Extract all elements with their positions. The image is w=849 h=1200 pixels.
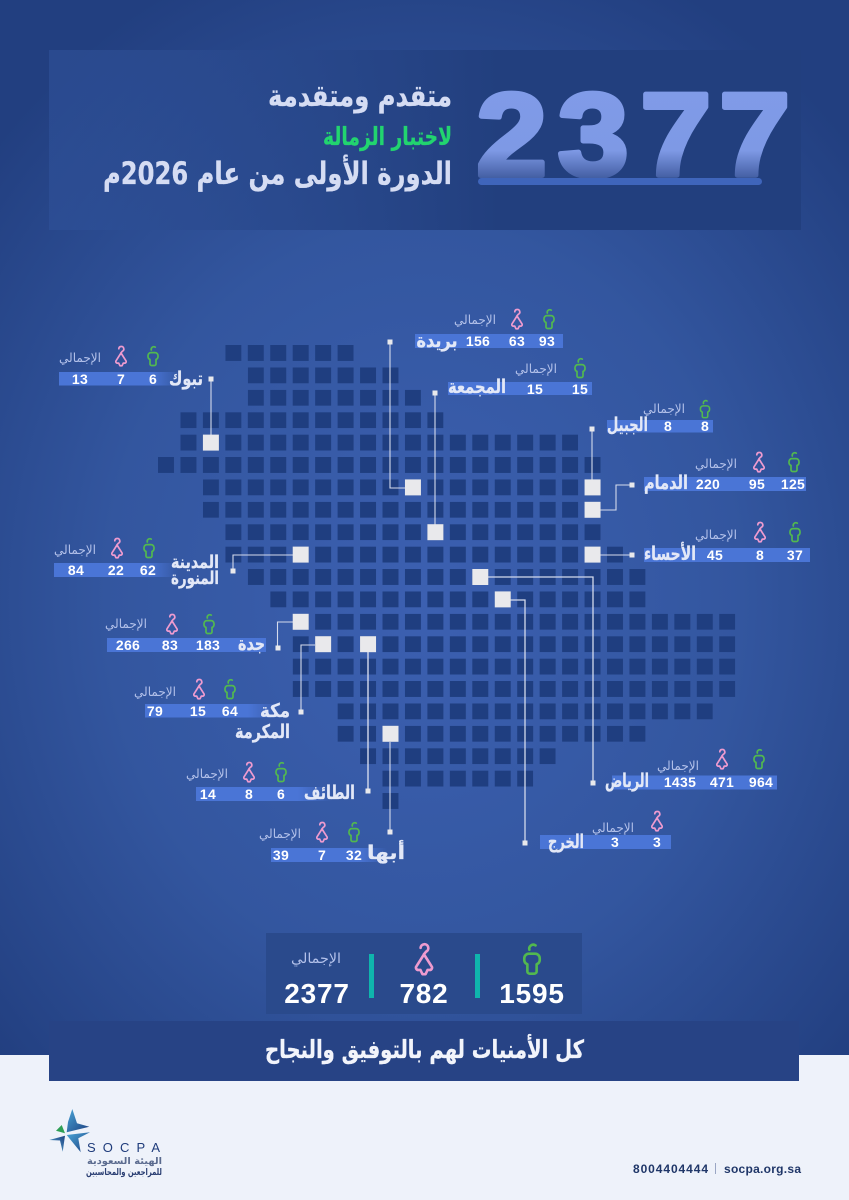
divider (369, 954, 374, 998)
city: Tabuk: تبوك (169, 368, 203, 390)
city: Madinah: 62 (140, 562, 156, 578)
city: Dammam: الإجمالي (695, 456, 737, 471)
city: Ahsa: 37 (787, 547, 803, 563)
city: Ahsa: 8 (756, 547, 764, 563)
city: Buraidah: بريدة (416, 330, 458, 352)
city: Madinah: المنورة (171, 568, 219, 589)
city: Dammam: الدمام (644, 472, 688, 494)
city: Madinah: الإجمالي (54, 542, 96, 557)
city: Jeddah (105, 614, 309, 655)
city: Tabuk: الإجمالي (59, 350, 101, 365)
city: Makkah: المكرمة (235, 721, 290, 743)
city: Tabuk: 7 (117, 371, 125, 387)
city: Jeddah: 183 (196, 637, 220, 653)
city: Makkah: 64 (222, 703, 238, 719)
city: Taif: 14 (200, 786, 216, 802)
city: Kharj (495, 591, 671, 853)
city: Jubail: الإجمالي (643, 401, 685, 416)
city: Majmaah: 15 (527, 381, 543, 397)
city: Jeddah: جدة (238, 633, 265, 655)
city: Taif (186, 636, 376, 804)
city: Buraidah: 63 (509, 333, 525, 349)
city: Madinah (54, 538, 309, 589)
city: Makkah: الإجمالي (134, 684, 176, 699)
heading line 2: لاختبار الزمالة (323, 122, 452, 152)
total column: الإجمالي (291, 951, 341, 967)
contact details (633, 1162, 801, 1176)
city: Ahsa: الأحساء (644, 542, 696, 565)
city: Riyadh (472, 569, 777, 792)
logo: SOCPA: الهيئة السعودية (87, 1156, 162, 1167)
city: Makkah: 15 (190, 703, 206, 719)
female column (399, 944, 449, 1009)
city: Makkah: مكة (260, 700, 290, 722)
city: Majmaah: الإجمالي (515, 361, 557, 376)
city: Ahsa: الإجمالي (695, 527, 737, 542)
city: Dammam (585, 452, 806, 518)
city: Abha: 32 (346, 847, 362, 863)
closing banner (49, 1021, 799, 1081)
city: Ahsa (585, 522, 810, 565)
city: Taif: 8 (245, 786, 253, 802)
heading line 1: متقدم ومتقدمة (268, 79, 452, 114)
city: Dammam: 95 (749, 476, 765, 492)
city: Dammam: 220 (696, 476, 720, 492)
logo: SOCPA: للمراجعين والمحاسبين (86, 1167, 162, 1178)
city: Kharj: 3 (611, 834, 619, 850)
logo: SOCPA: SOCPA (87, 1140, 160, 1155)
city: Jeddah: 83 (162, 637, 178, 653)
city: Jubail: 8 (701, 418, 709, 434)
male column (499, 945, 565, 1009)
city: Riyadh: 1435 (664, 774, 696, 790)
city: Madinah: 84 (68, 562, 84, 578)
city: Jubail (585, 401, 713, 495)
city: Kharj: 3 (653, 834, 661, 850)
city: Ahsa: 45 (707, 547, 723, 563)
header panel (49, 50, 801, 230)
city: Madinah: المدينة (171, 552, 219, 573)
city: Makkah (134, 636, 331, 743)
city: Taif: 6 (277, 786, 285, 802)
city: Kharj: الإجمالي (592, 820, 634, 835)
city: Abha: 39 (273, 847, 289, 863)
heading line 3: الدورة الأولى من عام 2026م (103, 154, 452, 192)
city: Tabuk: 13 (72, 371, 88, 387)
total column: 2377 (284, 978, 350, 1009)
contact details: 8004404444 (633, 1162, 708, 1176)
city: Jeddah: 266 (116, 637, 140, 653)
city: Buraidah (388, 309, 563, 495)
big number 2377: 2377 (476, 70, 790, 201)
city: Jubail: 8 (664, 418, 672, 434)
city: Majmaah: 15 (572, 381, 588, 397)
female column: 782 (399, 978, 449, 1009)
city: Taif: الطائف (304, 782, 355, 804)
city: Majmaah (427, 359, 592, 540)
city: Jubail: الجبيل (607, 414, 648, 436)
city: Abha: 7 (318, 847, 326, 863)
city: Riyadh: الرياض (605, 770, 649, 792)
icon: star (49, 1109, 90, 1152)
city: Majmaah: المجمعة (448, 376, 506, 398)
city: Riyadh: 964 (749, 774, 773, 790)
city: Abha: الإجمالي (259, 826, 301, 841)
city: Taif: الإجمالي (186, 766, 228, 781)
divider (475, 954, 480, 998)
city: Buraidah: الإجمالي (454, 312, 496, 327)
city: Dammam: 125 (781, 476, 805, 492)
closing banner: كل الأمنيات لهم بالتوفيق والنجاح (265, 1034, 584, 1065)
dot-grid map (158, 345, 735, 809)
city: Riyadh: الإجمالي (657, 758, 699, 773)
summary totals panel (266, 933, 582, 1014)
logo: SOCPA (49, 1109, 162, 1178)
city: Buraidah: 156 (466, 333, 490, 349)
city: Abha (259, 726, 405, 864)
total column (284, 951, 350, 1009)
city: Riyadh: 471 (710, 774, 734, 790)
contact details: socpa.org.sa (724, 1162, 801, 1176)
city: Tabuk (59, 346, 219, 451)
city: Abha: أبها (367, 840, 405, 864)
city: Tabuk: 6 (149, 371, 157, 387)
city: Kharj: الخرج (548, 831, 584, 853)
city: Jeddah: الإجمالي (105, 616, 147, 631)
city: Buraidah: 93 (539, 333, 555, 349)
city: Madinah: 22 (108, 562, 124, 578)
city: Makkah: 79 (147, 703, 163, 719)
male column: 1595 (499, 978, 565, 1009)
